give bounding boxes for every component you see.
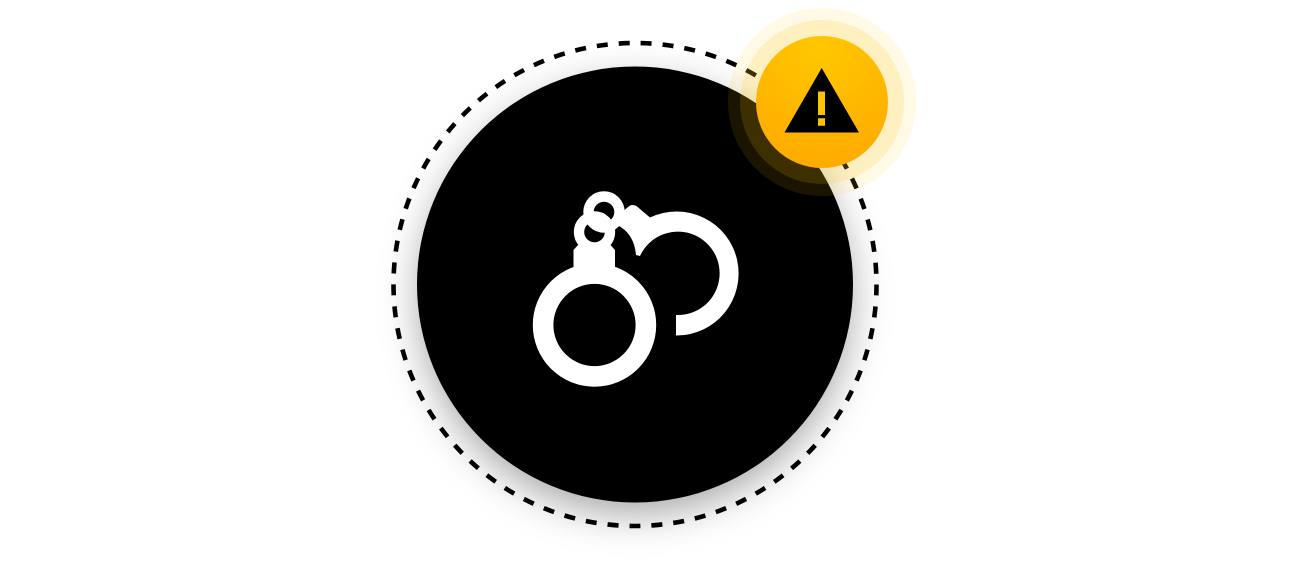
inner halo bbox=[740, 20, 904, 184]
drop shadow of main circle bbox=[420, 83, 850, 513]
warning badge bbox=[728, 8, 916, 196]
cuff neck bbox=[574, 245, 615, 275]
outer halo bbox=[728, 8, 916, 196]
icon: handcuffs bbox=[543, 196, 739, 376]
amber disc bbox=[756, 36, 888, 168]
exclamation mark bbox=[818, 92, 825, 126]
dashed outer ring bbox=[394, 43, 876, 526]
open cuff bbox=[617, 205, 739, 336]
lower chain link bbox=[579, 216, 610, 248]
icon: warning triangle bbox=[784, 68, 859, 132]
closed cuff ring bbox=[543, 274, 646, 376]
upper chain link bbox=[588, 196, 620, 228]
main black circle bbox=[417, 66, 853, 502]
